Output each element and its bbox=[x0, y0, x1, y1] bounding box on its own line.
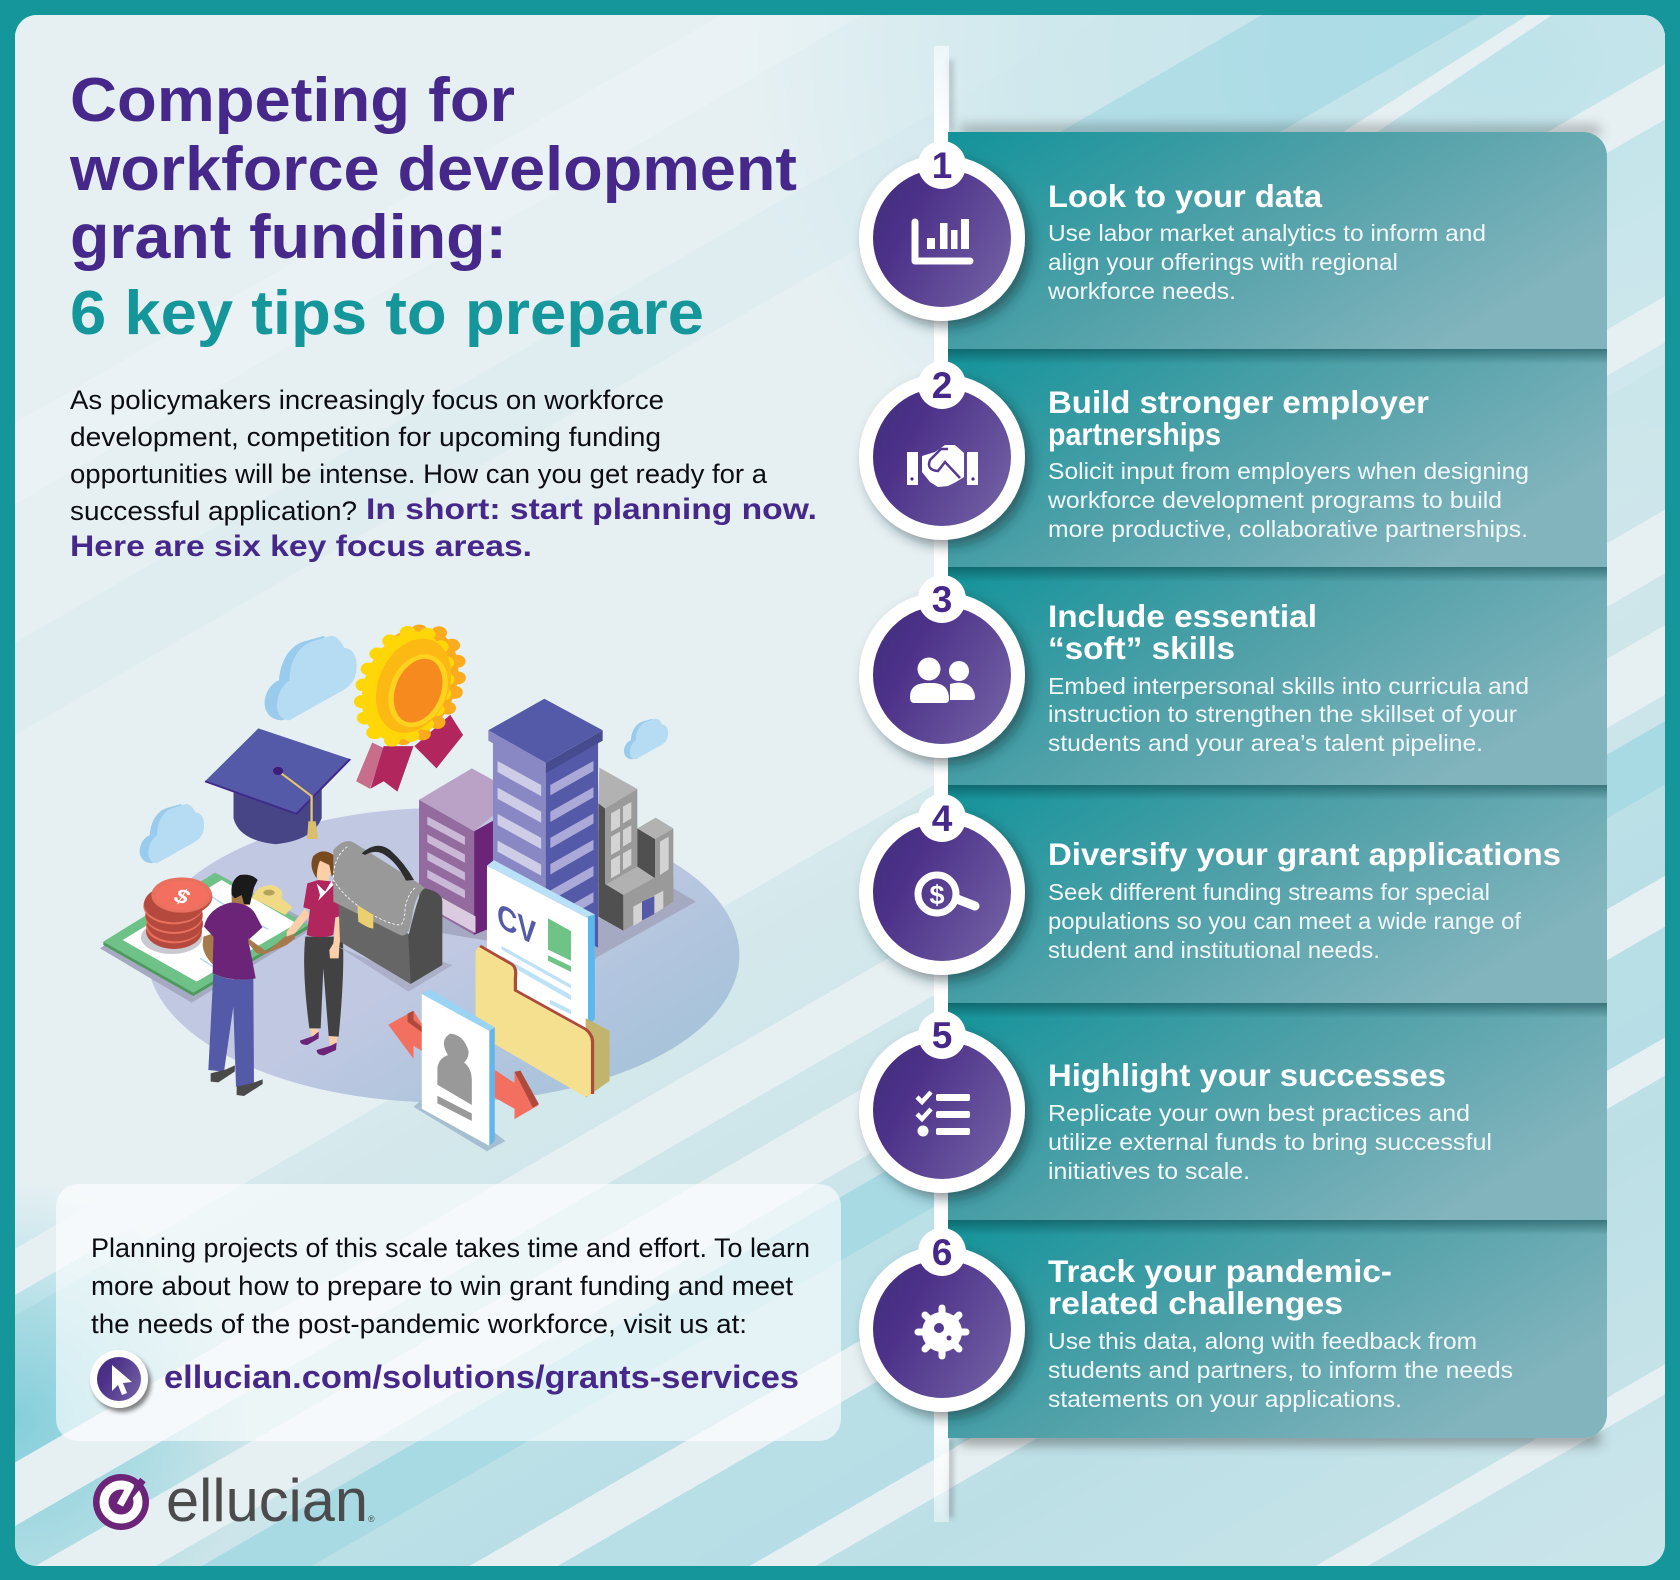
cloud left small bbox=[140, 804, 204, 863]
tip 5 icon: checklist bbox=[859, 1027, 1025, 1193]
tip 5 text: utilize external funds to bring successful bbox=[1048, 1129, 1492, 1155]
CV document bbox=[487, 860, 595, 1029]
tip 2 text bbox=[1047, 384, 1529, 542]
tip 1 number: 1 bbox=[932, 145, 952, 186]
tip 3 text: Include essential bbox=[1048, 598, 1317, 634]
tip 4 icon: magnifier dollar bbox=[859, 809, 1025, 975]
tip 6 text: related challenges bbox=[1048, 1285, 1343, 1321]
folder bbox=[475, 946, 610, 1098]
tip 4 number bbox=[918, 794, 966, 842]
panel: tip 1 bbox=[859, 132, 1607, 349]
tip 5 background bbox=[948, 1003, 1607, 1220]
tip 1 text bbox=[1047, 178, 1486, 304]
title: 6 key tips to prepare bbox=[70, 279, 704, 348]
title: grant funding: bbox=[70, 203, 507, 272]
tip 2 number bbox=[918, 361, 966, 409]
intro text: successful application? bbox=[70, 496, 357, 526]
call to action text: the needs of the post-pandemic workforce, visit us at: bbox=[91, 1309, 747, 1339]
coin stack bbox=[141, 877, 212, 954]
tip 6 text: Track your pandemic- bbox=[1048, 1253, 1392, 1289]
arrows bbox=[388, 1011, 539, 1119]
intro text: Here are six key focus areas. bbox=[70, 530, 532, 563]
tip 4 background bbox=[948, 785, 1607, 1003]
briefcase bbox=[333, 841, 453, 992]
CV document: CV bbox=[497, 895, 536, 954]
tip 3 number bbox=[918, 575, 966, 623]
intro text bbox=[70, 385, 817, 563]
tip 4 icon: magnifier dollar: $ bbox=[929, 880, 945, 910]
panel: tip 4 bbox=[859, 785, 1607, 1003]
tip 4 text: populations so you can meet a wide range of bbox=[1048, 908, 1521, 934]
man figure bbox=[203, 875, 295, 1096]
logo: ellucian: ellucian bbox=[166, 1467, 368, 1534]
tip 6 number: 6 bbox=[932, 1232, 952, 1273]
tip 2 text: more productive, collaborative partnerships. bbox=[1048, 516, 1528, 542]
tip 6 text: students and partners, to inform the needs bbox=[1048, 1357, 1513, 1383]
tip 6 text: Use this data, along with feedback from bbox=[1048, 1328, 1477, 1354]
tip 2 text: Solicit input from employers when designing bbox=[1048, 458, 1529, 484]
timeline line bbox=[934, 46, 1600, 1522]
intro text: opportunities will be intense. How can you get ready for a bbox=[70, 459, 767, 489]
cloud left large bbox=[265, 636, 357, 720]
tip 6 number bbox=[918, 1228, 966, 1276]
woman figure bbox=[287, 851, 345, 1055]
tip 1 background bbox=[948, 132, 1607, 349]
intro text: As policymakers increasingly focus on workforce bbox=[70, 385, 664, 415]
panel: tip 2 bbox=[859, 349, 1607, 567]
tip 4 text bbox=[1048, 836, 1561, 963]
tip 6 text bbox=[1048, 1253, 1513, 1412]
tip 4 number: 4 bbox=[932, 798, 953, 839]
tip 1 icon: bar chart bbox=[859, 155, 1025, 321]
illustration: career and grant isometric scene bbox=[100, 623, 739, 1151]
ground shadow of buildings bbox=[441, 911, 597, 959]
award medal bbox=[348, 623, 472, 792]
tip 3 text: instruction to strengthen the skillset of your bbox=[1048, 701, 1517, 727]
gray building bbox=[595, 768, 696, 958]
coin stack: $ bbox=[169, 885, 195, 909]
tip 3 text bbox=[1048, 598, 1529, 756]
tip 3 number: 3 bbox=[932, 579, 952, 620]
call to action text: Planning projects of this scale takes time and effort. To learn bbox=[91, 1233, 810, 1263]
link: ellucian.com/solutions/grants-services bbox=[164, 1359, 799, 1395]
tip 6 icon: virus bbox=[859, 1246, 1025, 1412]
tip 1 text: align your offerings with regional bbox=[1048, 249, 1398, 275]
tip 3 icon: people bbox=[859, 592, 1025, 758]
tall blue building bbox=[488, 699, 603, 948]
title: Competing for bbox=[70, 66, 515, 135]
tip 5 number bbox=[918, 1011, 966, 1059]
ID card bbox=[414, 989, 505, 1151]
intro text: development, competition for upcoming funding bbox=[70, 422, 661, 452]
tip 2 text: workforce development programs to build bbox=[1047, 487, 1502, 513]
icon: cursor bbox=[90, 1350, 148, 1408]
title: workforce development bbox=[69, 135, 797, 204]
tip 2 text: partnerships bbox=[1048, 416, 1221, 452]
tip 5 text: initiatives to scale. bbox=[1048, 1158, 1250, 1184]
intro text: In short: start planning now. bbox=[366, 493, 817, 526]
logo: ellucian: ® bbox=[368, 1514, 375, 1524]
green clipboard bbox=[100, 873, 313, 1003]
tip 5 text: Replicate your own best practices and bbox=[1048, 1100, 1470, 1126]
tip 3 text: “soft” skills bbox=[1048, 630, 1235, 666]
tip 2 icon: handshake bbox=[859, 374, 1025, 540]
title bbox=[69, 66, 797, 348]
tip 5 number: 5 bbox=[932, 1015, 952, 1056]
call to action text: more about how to prepare to win grant funding and meet bbox=[91, 1271, 794, 1301]
tip 2 background bbox=[948, 349, 1607, 567]
tip 3 text: Embed interpersonal skills into curricula and bbox=[1048, 673, 1529, 699]
call to action box bbox=[56, 1184, 841, 1441]
key bbox=[252, 885, 293, 915]
purple building bbox=[419, 768, 519, 935]
tip 5 text: Highlight your successes bbox=[1048, 1057, 1446, 1093]
tip 3 background bbox=[948, 567, 1607, 785]
tip 1 text: Use labor market analytics to inform and bbox=[1048, 220, 1486, 246]
tip 1 text: Look to your data bbox=[1048, 178, 1322, 214]
top right background bands bbox=[1060, 15, 1552, 132]
call to action text bbox=[91, 1233, 810, 1339]
cloud right small bbox=[624, 719, 668, 759]
tip 4 text: student and institutional needs. bbox=[1048, 937, 1380, 963]
ground disc bbox=[147, 808, 739, 1102]
tip 1 text: workforce needs. bbox=[1047, 278, 1236, 304]
tip 5 text bbox=[1048, 1057, 1492, 1184]
tip 2 number: 2 bbox=[932, 365, 952, 406]
tip 1 number bbox=[918, 141, 966, 189]
tip 3 text: students and your area’s talent pipeline. bbox=[1048, 730, 1483, 756]
tip 4 text: Seek different funding streams for special bbox=[1048, 879, 1490, 905]
panel: tip 6 bbox=[859, 1220, 1607, 1438]
tip 6 text: statements on your applications. bbox=[1048, 1386, 1402, 1412]
tip 4 text: Diversify your grant applications bbox=[1048, 836, 1561, 872]
tip 2 text: Build stronger employer bbox=[1048, 384, 1429, 420]
panel: tip 5 bbox=[859, 1003, 1607, 1220]
panel: tip 3 bbox=[859, 567, 1607, 785]
tip 6 background bbox=[948, 1220, 1607, 1438]
graduation cap bbox=[205, 728, 350, 844]
